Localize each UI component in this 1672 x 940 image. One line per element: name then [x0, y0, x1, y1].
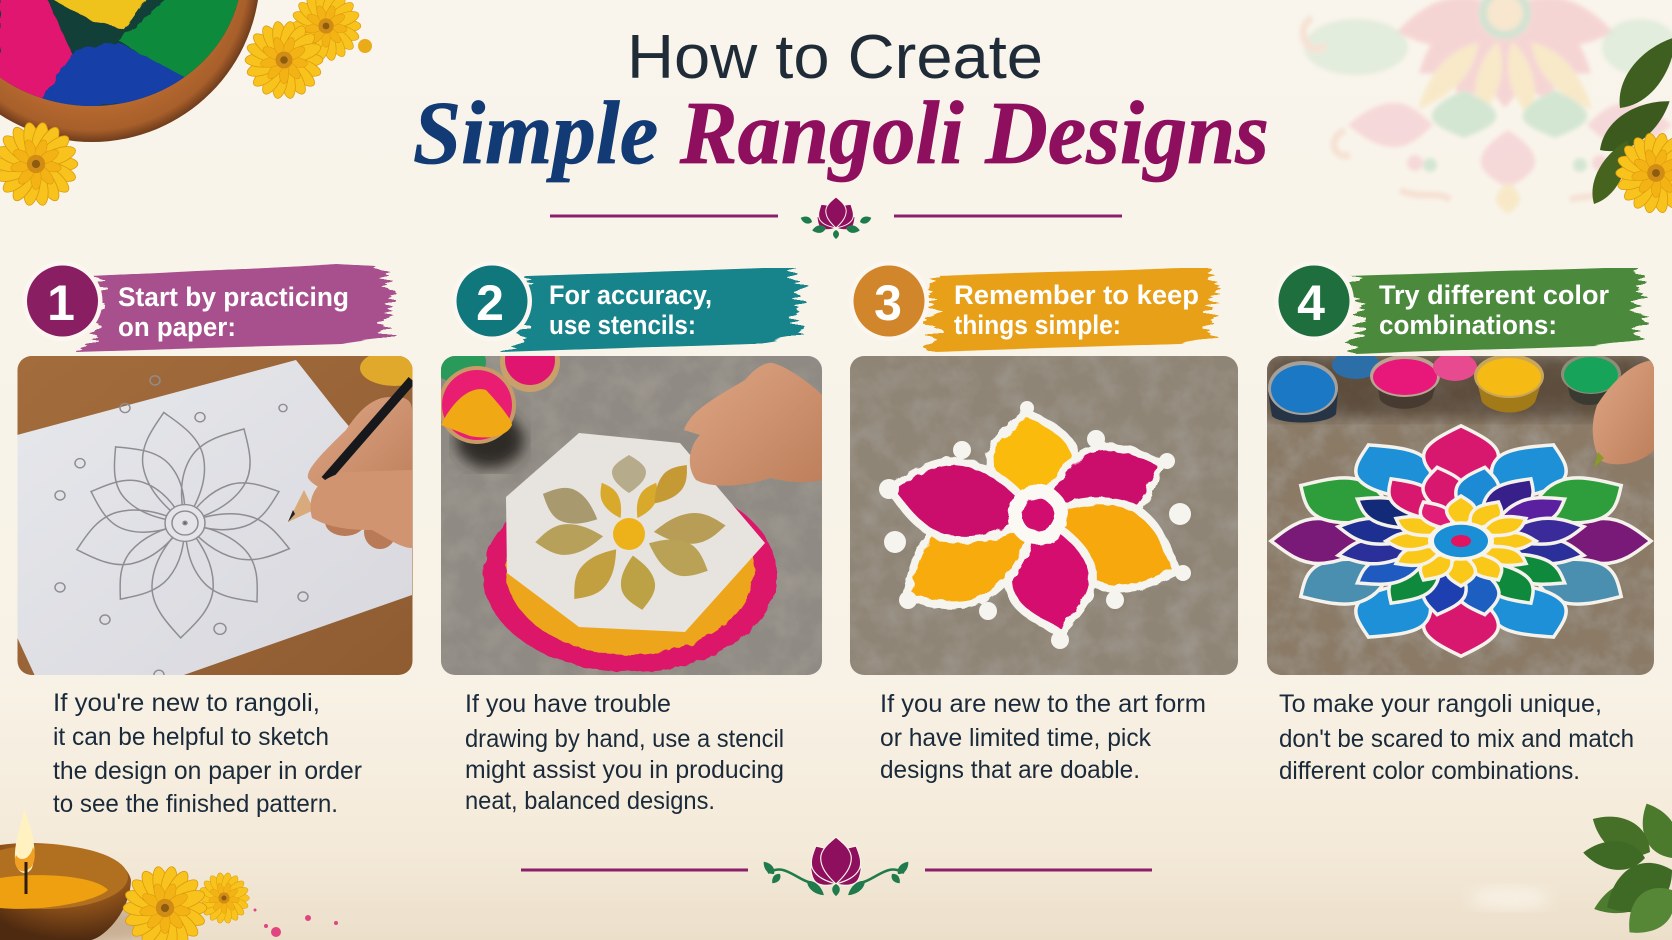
step 3 heading: things simple: [954, 310, 1121, 340]
step 1 number badge [22, 261, 102, 341]
step 1 description: If you're new to rangoli, [53, 689, 320, 717]
step 2 panel [430, 261, 822, 815]
step 1 brush banner [86, 264, 388, 352]
step 4 description: different color combinations. [1279, 757, 1580, 785]
step 4 description: don't be scared to mix and match [1279, 725, 1634, 753]
step 1 description: the design on paper in order [53, 757, 362, 785]
step 1 photo: pencil sketch [17, 350, 430, 679]
step 3 number badge [849, 261, 929, 341]
step 3 brush banner [928, 268, 1214, 352]
bottom-right leaves [1470, 797, 1672, 940]
step 2 heading [549, 280, 712, 340]
step 4 heading [1379, 280, 1609, 340]
step 4 heading: Try different color [1379, 280, 1609, 310]
top divider with lotus [550, 197, 1122, 239]
step 3 heading [954, 280, 1199, 340]
step 3 photo: simple rangoli [850, 356, 1238, 676]
bottom divider with lotus [521, 837, 1152, 898]
step 2 description: If you have trouble [465, 690, 671, 718]
diya lamp and marigolds bottom left [0, 808, 338, 940]
step 2 description [465, 690, 784, 815]
marigolds top left [0, 0, 372, 207]
step 2 brush banner [510, 268, 800, 352]
step 4 brush banner [1350, 268, 1640, 354]
step 1 heading: on paper: [118, 312, 236, 342]
step 2 heading: For accuracy, [549, 280, 712, 310]
step 2 number badge [452, 261, 532, 341]
step 4 heading: combinations: [1379, 310, 1557, 340]
step 3 description: designs that are doable. [880, 756, 1140, 784]
step 3 heading: Remember to keep [954, 280, 1199, 310]
step 3 description [880, 690, 1206, 784]
step 1 heading: Start by practicing [118, 282, 349, 312]
step 2 description: neat, balanced designs. [465, 787, 715, 815]
step 1 description [53, 689, 362, 818]
step 4 number badge: 4 [1297, 275, 1325, 331]
step 1 panel [17, 261, 430, 818]
step 2 photo: stencil [430, 332, 822, 676]
step 2 description: might assist you in producing [465, 756, 784, 784]
step 1 description: it can be helpful to sketch [53, 723, 329, 751]
title [413, 23, 1269, 183]
step 4 panel [1267, 261, 1654, 785]
step 4 description: To make your rangoli unique, [1279, 690, 1602, 718]
title line 1: How to Create [627, 23, 1043, 92]
step 3 number badge: 3 [874, 275, 902, 331]
step 2 number badge: 2 [476, 275, 504, 331]
step 3 panel [849, 261, 1238, 784]
step 2 heading: use stencils: [549, 310, 696, 340]
step 3 description: or have limited time, pick [880, 724, 1151, 752]
faded mandala watermark [1303, 0, 1672, 214]
step 4 description [1279, 690, 1634, 785]
step 1 heading [118, 282, 349, 342]
step 3 description: If you are new to the art form [880, 690, 1206, 718]
step 2 description: drawing by hand, use a stencil [465, 725, 784, 753]
step 1 description: to see the finished pattern. [53, 790, 338, 818]
top-left powder bowl [0, 0, 260, 142]
step 4 photo: colorful rangoli [1267, 351, 1654, 676]
title line 2: Simple Rangoli Designs [413, 84, 1269, 183]
step 1 number badge: 1 [47, 275, 75, 331]
top-right leaves and marigold [1583, 27, 1672, 214]
step 4 number badge [1274, 261, 1354, 341]
